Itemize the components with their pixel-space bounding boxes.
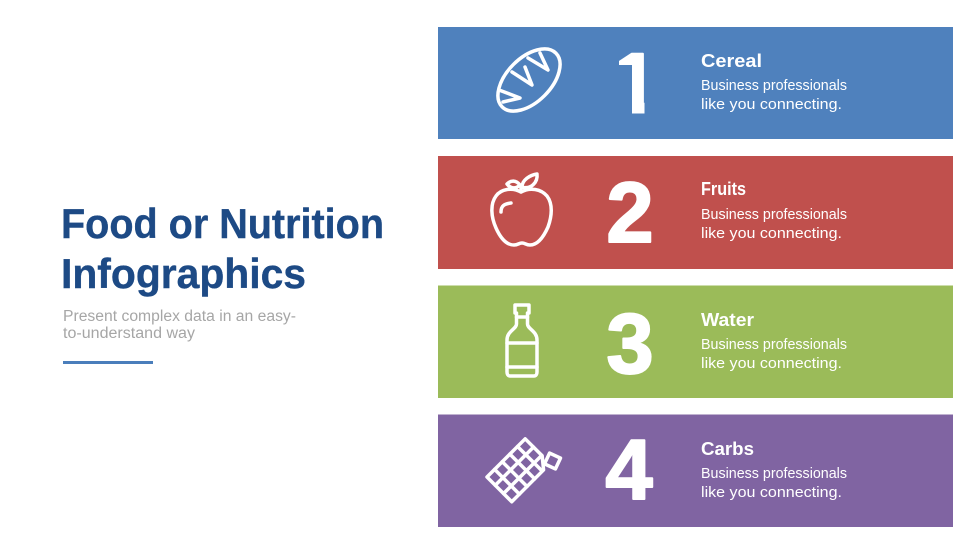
subtitle: Present complex data in an easy- (63, 308, 296, 325)
number 2: 2 (606, 166, 654, 261)
description: cereal (701, 77, 847, 113)
title (61, 200, 384, 297)
description: fruits: like you connecting. (701, 225, 842, 242)
description: carbs: Business professionals (701, 465, 847, 482)
heading: water: Water (701, 310, 754, 330)
description: cereal: like you connecting. (701, 96, 842, 113)
description: carbs (701, 465, 847, 501)
heading: fruits: Fruits (701, 179, 746, 199)
subtitle: to-understand way (63, 325, 195, 342)
panel: water (438, 286, 953, 398)
description: water (701, 336, 847, 372)
icon: bread (487, 38, 571, 122)
heading: cereal: Cereal (701, 51, 762, 71)
number 4: 4 (605, 423, 653, 518)
heading: carbs: Carbs (701, 439, 754, 459)
number 3: 3 (606, 297, 654, 392)
title: Food or Nutrition (61, 200, 384, 247)
description: cereal: Business professionals (701, 77, 847, 94)
accent underline (63, 361, 153, 364)
subtitle (63, 308, 296, 342)
icon: chocolate bar (487, 439, 560, 502)
panel: cereal (438, 27, 953, 139)
description: fruits: Business professionals (701, 206, 847, 223)
title: Infographics (61, 250, 306, 297)
panel: carbs (438, 414, 953, 527)
description: water: Business professionals (701, 336, 847, 353)
description: fruits (701, 206, 847, 242)
number 1: 1 (611, 36, 659, 132)
icon: bottle (507, 305, 537, 376)
description: carbs: like you connecting. (701, 484, 842, 501)
description: water: like you connecting. (701, 355, 842, 372)
icon: apple (492, 174, 551, 245)
panel: fruits (438, 156, 953, 269)
